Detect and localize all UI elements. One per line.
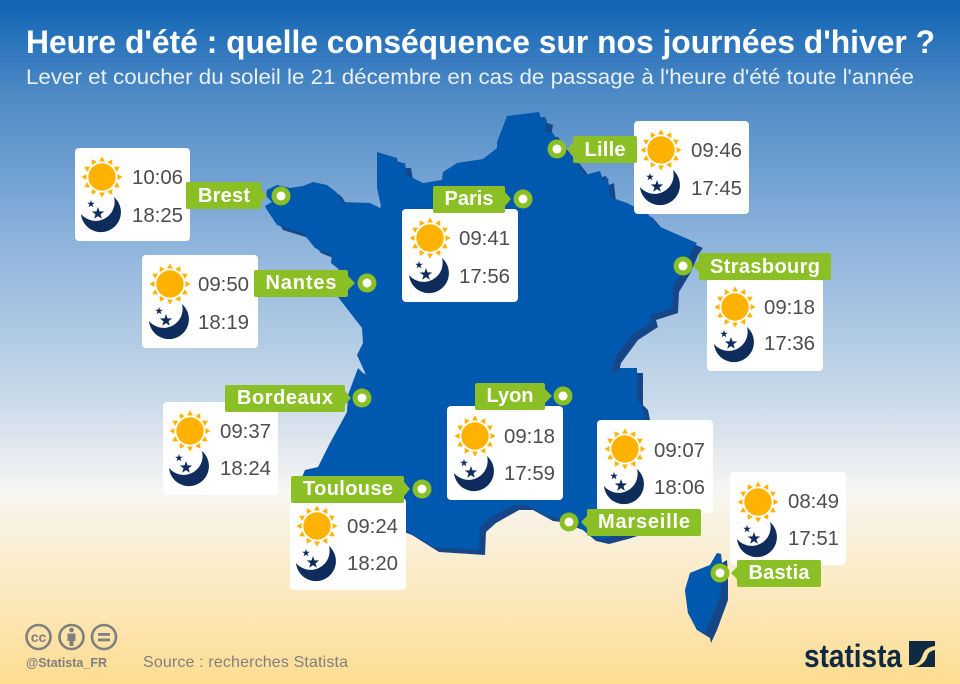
panel: Bordeaux [163, 385, 372, 495]
icon: moon [409, 258, 449, 293]
sunrise time: 09:41 [459, 228, 510, 250]
source: Source : recherches Statista [143, 654, 348, 671]
city marker [674, 256, 692, 276]
city label [186, 182, 267, 209]
icon: sun [82, 156, 122, 198]
city marker [554, 386, 572, 406]
map: Corsica [685, 553, 728, 643]
icon: sun [640, 130, 682, 170]
logo: statista mark [909, 641, 935, 667]
logo: statista wordmark: statista [804, 638, 902, 674]
city label: Brest [198, 185, 250, 207]
sunrise time: 09:18 [764, 297, 815, 319]
icon: moon [714, 327, 754, 362]
panel: Brest [75, 148, 290, 241]
icon: sun [454, 416, 496, 456]
city label: Bordeaux [237, 387, 333, 409]
sunset time: 17:56 [459, 266, 510, 288]
city label: Lille [584, 139, 626, 161]
sunrise time: 09:50 [198, 274, 249, 296]
icon: sun [714, 286, 756, 328]
icon: attribution [60, 625, 84, 649]
icon: moon [81, 197, 121, 232]
sunset time: 18:06 [654, 477, 705, 499]
city marker [272, 186, 290, 206]
city marker [352, 388, 372, 408]
panel: Marseille [560, 420, 713, 536]
icon: sun [604, 428, 646, 470]
city label: Nantes [266, 272, 336, 294]
city label: Toulouse [303, 478, 393, 500]
icon: creative commons: cc [31, 629, 46, 645]
panel: Bastia [710, 472, 846, 587]
city label [291, 476, 410, 503]
sunrise time: 08:49 [788, 491, 839, 513]
panel: Nantes [142, 255, 376, 348]
sunset time: 18:25 [132, 205, 183, 227]
sunset time: 17:59 [504, 463, 555, 485]
sunrise time: 09:37 [220, 421, 271, 443]
sunset time: 17:51 [788, 528, 839, 550]
icon: moon [169, 451, 209, 486]
sunset time: 17:36 [764, 333, 815, 355]
city marker [548, 140, 566, 158]
icon: moon [640, 170, 680, 205]
city label [254, 270, 355, 297]
icon: sun [150, 264, 190, 304]
icon: moon [604, 469, 644, 504]
city marker [358, 274, 376, 292]
icon: moon [454, 456, 494, 491]
city label [693, 253, 831, 280]
sunset time: 18:19 [198, 312, 249, 334]
icon: moon [296, 546, 336, 581]
city label: Marseille [598, 511, 690, 533]
city marker [560, 512, 578, 532]
city label [581, 509, 701, 536]
sunrise time: 09:18 [504, 426, 555, 448]
subtitle: Lever et coucher du soleil le 21 décembre en cas de passage à l'heure d'été toute l'année [26, 66, 914, 89]
sunset time: 18:20 [347, 553, 398, 575]
panel: Lille [548, 121, 749, 214]
city label: Strasbourg [710, 256, 820, 278]
city label: Lyon [486, 385, 534, 407]
city label [225, 385, 351, 412]
sunrise time: 09:46 [691, 140, 742, 162]
panel: Toulouse [290, 476, 432, 590]
city marker [710, 564, 730, 582]
panel: Lyon [447, 383, 572, 500]
sunset time: 18:24 [220, 458, 271, 480]
icon: sun [170, 410, 210, 452]
map: France [265, 112, 703, 555]
handle: @Statista_FR [26, 656, 107, 670]
city label: Bastia [748, 562, 810, 584]
icon: sun [738, 482, 778, 522]
title: Heure d'été : quelle conséquence sur nos journées d'hiver ? [26, 24, 935, 60]
panel: Paris [402, 186, 532, 302]
sunrise time: 09:24 [347, 516, 398, 538]
sunset time: 17:45 [691, 178, 742, 200]
city label [567, 136, 637, 163]
icon: sun [296, 506, 338, 546]
icon: creative commons [26, 625, 50, 649]
sunrise time: 09:07 [654, 440, 705, 462]
city marker [514, 190, 532, 208]
icon: moon [737, 522, 777, 557]
icon: no derivatives [92, 625, 116, 649]
city label: Paris [444, 188, 494, 210]
icon: moon [149, 304, 189, 339]
panel: Strasbourg [674, 253, 831, 371]
city marker [412, 480, 432, 498]
sunrise time: 10:06 [132, 167, 183, 189]
icon: sun [410, 218, 450, 258]
